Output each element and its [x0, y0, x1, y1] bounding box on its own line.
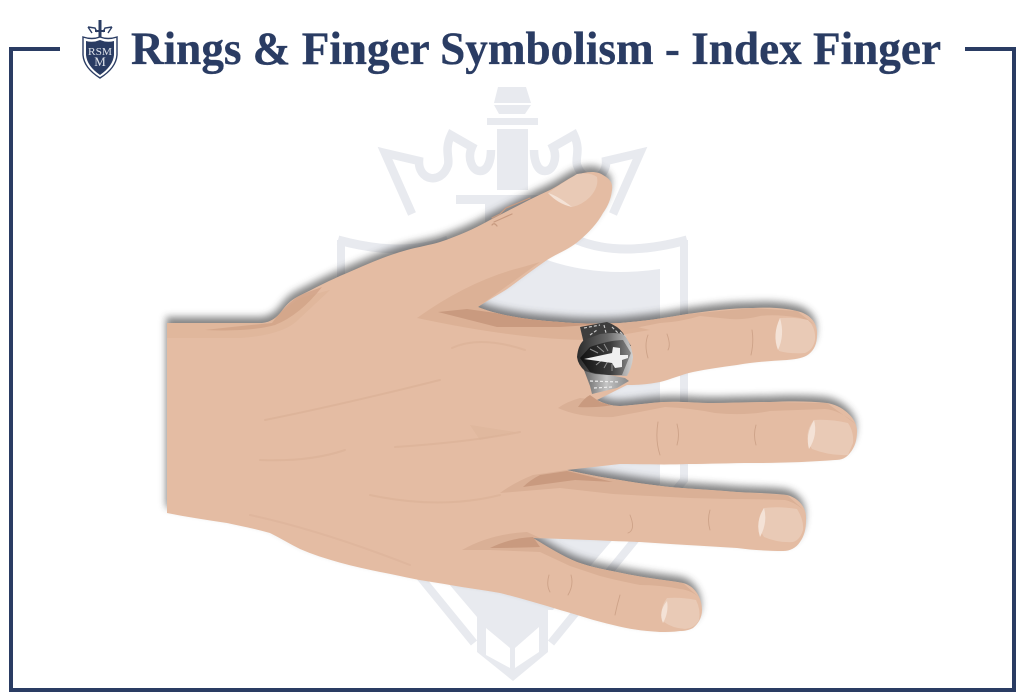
watermark: shield, crown and sword	[338, 87, 687, 681]
fingernail: ring	[758, 507, 803, 542]
ring sword emblem	[584, 347, 628, 368]
logo: RSM shield and crown: RSM	[88, 47, 113, 58]
ring on index finger	[577, 322, 633, 394]
knuckle and vein creases	[250, 198, 756, 615]
fingernail: little	[661, 598, 700, 629]
ring band bottom	[584, 370, 629, 394]
logo: RSM shield and crown: M	[94, 54, 106, 69]
ring body	[577, 333, 633, 376]
fingernail: thumb	[548, 173, 597, 207]
fingernail: index	[775, 318, 815, 353]
hand shadow	[166, 166, 856, 626]
finger and hand shading	[167, 262, 857, 600]
ring band top	[580, 322, 631, 346]
hand illustration	[167, 172, 857, 632]
ring face shield	[580, 340, 631, 375]
fingernail: middle	[807, 420, 853, 455]
title: Rings & Finger Symbolism - Index Finger	[131, 23, 941, 75]
logo: RSM shield and crown	[83, 20, 117, 78]
